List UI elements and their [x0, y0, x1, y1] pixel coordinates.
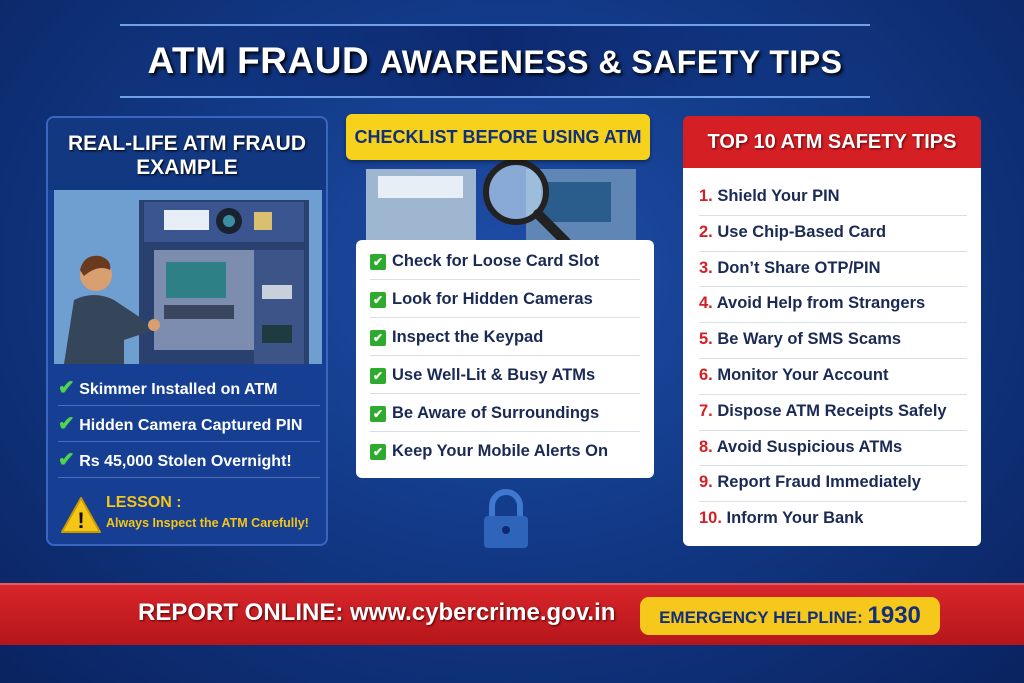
list: checklist items: ✔ [373, 331, 383, 345]
list: checklist items: ✔ [373, 255, 383, 269]
list: safety tips: 1. Shield Your PIN [699, 187, 840, 205]
title: ATM FRAUD AWARENESS & SAFETY TIPS [148, 40, 842, 81]
heading: checklist: CHECKLIST BEFORE USING ATM [354, 127, 642, 147]
heading: real-life example: REAL-LIFE ATM FRAUD [68, 132, 306, 155]
callout: emergency helpline [640, 597, 940, 635]
text: report online: REPORT ONLINE: www.cybercrime.gov.in [138, 599, 615, 626]
list: safety tips: 2. Use Chip-Based Card [699, 223, 886, 241]
list: checklist items: Check for Loose Card Slot [392, 252, 599, 270]
illustration: man at ATM [54, 190, 322, 364]
panel: top 10 tips [683, 116, 981, 546]
list: checklist items: Keep Your Mobile Alerts On [392, 442, 608, 460]
list: safety tips: 5. Be Wary of SMS Scams [699, 330, 901, 348]
callout: lesson [61, 494, 309, 533]
icon: padlock [484, 489, 528, 548]
list: checklist items: Inspect the Keypad [392, 328, 543, 346]
list: checklist items: Look for Hidden Cameras [392, 290, 593, 308]
callout: lesson: Always Inspect the ATM Carefully! [106, 516, 309, 530]
panel: checklist [344, 114, 654, 478]
list: safety tips: 7. Dispose ATM Receipts Safely [699, 402, 947, 420]
callout: emergency helpline: EMERGENCY HELPLINE: 1930 [659, 602, 921, 629]
list: checklist items: Be Aware of Surroundings [392, 404, 599, 422]
heading: top 10 tips [683, 116, 981, 168]
panel: real-life example [46, 116, 328, 546]
list: checklist items: ✔ [373, 445, 383, 459]
list: checklist items: ✔ [373, 293, 383, 307]
heading: real-life example [48, 118, 326, 190]
list: safety tips: 8. Avoid Suspicious ATMs [699, 438, 902, 456]
callout: lesson: LESSON : [106, 494, 182, 511]
list: checklist items: ✔ [373, 407, 383, 421]
list: checklist items: Use Well-Lit & Busy ATMs [392, 366, 595, 384]
list: safety tips: 9. Report Fraud Immediately [699, 473, 921, 491]
title [120, 24, 870, 98]
list: safety tips: 4. Avoid Help from Strangers [699, 294, 925, 312]
list: safety tips [683, 168, 981, 546]
list: safety tips: 10. Inform Your Bank [699, 509, 863, 527]
checklist: fraud facts: ✔ Skimmer Installed on ATM [58, 377, 277, 399]
checklist: fraud facts: ✔ Hidden Camera Captured PIN [58, 413, 302, 435]
heading: top 10 tips: TOP 10 ATM SAFETY TIPS [708, 131, 956, 153]
checklist: fraud facts [58, 377, 320, 478]
checklist: fraud facts: ✔ Rs 45,000 Stolen Overnight! [58, 449, 292, 471]
illustration: ATMs with magnifier [366, 160, 636, 240]
callout: lesson: ! [77, 508, 85, 533]
list: checklist items [356, 240, 654, 478]
heading: real-life example: EXAMPLE [136, 156, 238, 179]
list: safety tips: 3. Don’t Share OTP/PIN [699, 259, 881, 277]
footer banner [0, 583, 1024, 645]
list: checklist items: ✔ [373, 369, 383, 383]
list: safety tips: 6. Monitor Your Account [699, 366, 888, 384]
heading: checklist [346, 114, 650, 160]
